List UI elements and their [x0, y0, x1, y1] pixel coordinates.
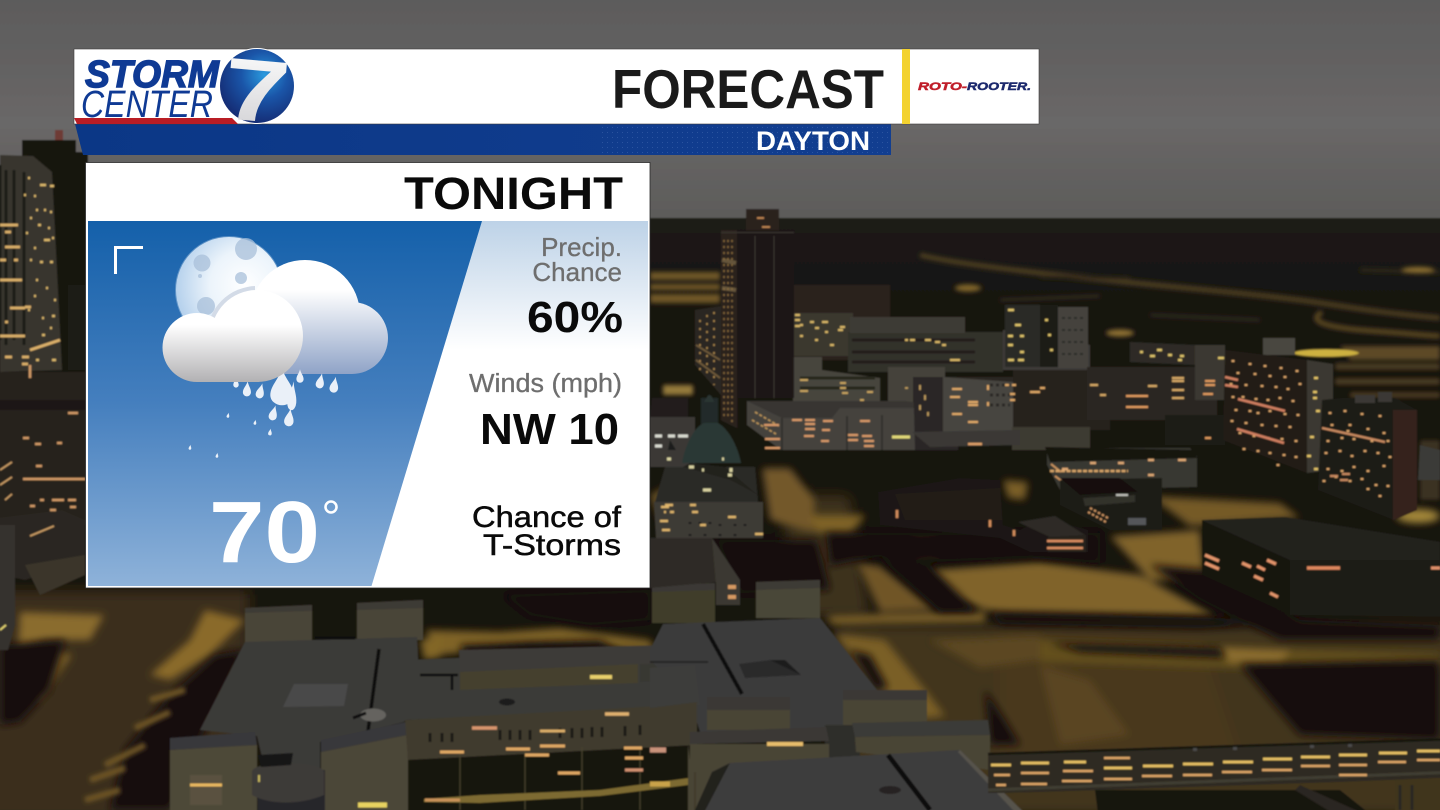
red accent strip [74, 118, 238, 124]
heading: Tonight: TONIGHT [404, 168, 623, 219]
lit ground patches [0, 495, 1440, 810]
winds: NW 10 [480, 405, 619, 454]
precipitation chance: Chance [532, 257, 622, 287]
location label: Dayton: DAYTON [756, 126, 870, 156]
conditions summary: T-Storms [483, 529, 621, 562]
sky [0, 0, 1440, 219]
conditions summary: Chance of [472, 501, 622, 534]
sponsor logo: Roto-Rooter: ROTO- [918, 81, 967, 93]
large dark right-hand buildings [1223, 338, 1440, 520]
foreground complex: left section [170, 600, 423, 810]
blue slanted panel [88, 221, 482, 586]
sponsor logo: Roto-Rooter [918, 81, 1031, 93]
title: Forecast: FORECAST [612, 58, 884, 120]
logo: Storm Center 7: STORM [85, 54, 220, 96]
logo: Storm Center 7: CENTER [81, 84, 213, 126]
foreground complex: right section [650, 538, 1042, 810]
right data background [88, 221, 648, 586]
distant roads and glow [650, 255, 1440, 500]
precipitation chance: 60% [527, 293, 623, 342]
grey wall grids [852, 340, 975, 362]
front cloud [162, 286, 307, 386]
front low buildings [878, 447, 1440, 617]
low grey block in front of tower [747, 401, 928, 450]
logo: Storm Center 7: 7 [219, 38, 294, 143]
panel: tonight forecast card [86, 162, 650, 588]
back cloud [250, 260, 388, 374]
corner bracket [116, 248, 143, 274]
domed church [654, 395, 763, 538]
winds: Winds (mph) [469, 370, 622, 398]
icon: moon behind storm clouds with rain [162, 236, 388, 458]
winds [469, 370, 622, 454]
white grey mid building [905, 377, 1020, 450]
moon [175, 236, 283, 344]
yellow divider [902, 49, 910, 124]
temperature: 70 degrees: 70 [209, 484, 320, 581]
precipitation chance [527, 232, 623, 342]
building behind dome corner [650, 398, 695, 467]
front roof [688, 750, 1042, 810]
tall dark tower [695, 209, 794, 428]
sponsor logo: Roto-Rooter: ROOTER. [967, 81, 1031, 93]
amber streaks in shadow [85, 690, 185, 800]
header banner [74, 38, 1039, 156]
elevated walkway [988, 739, 1440, 810]
white title strip [74, 49, 1039, 124]
logo: Storm Center 7 [81, 38, 295, 143]
mid-distance buildings [793, 285, 1225, 450]
precipitation chance: Precip. [541, 232, 622, 262]
card frame [86, 162, 650, 588]
blue subtitle bar [75, 124, 891, 156]
bright glow near horizon [1293, 349, 1359, 357]
rain drops [188, 368, 340, 458]
conditions summary [472, 501, 622, 562]
left skyline [0, 130, 90, 650]
streaky shadows on ground [0, 533, 1440, 810]
foreground complex: center section [405, 645, 697, 810]
dark ground [0, 218, 1440, 810]
